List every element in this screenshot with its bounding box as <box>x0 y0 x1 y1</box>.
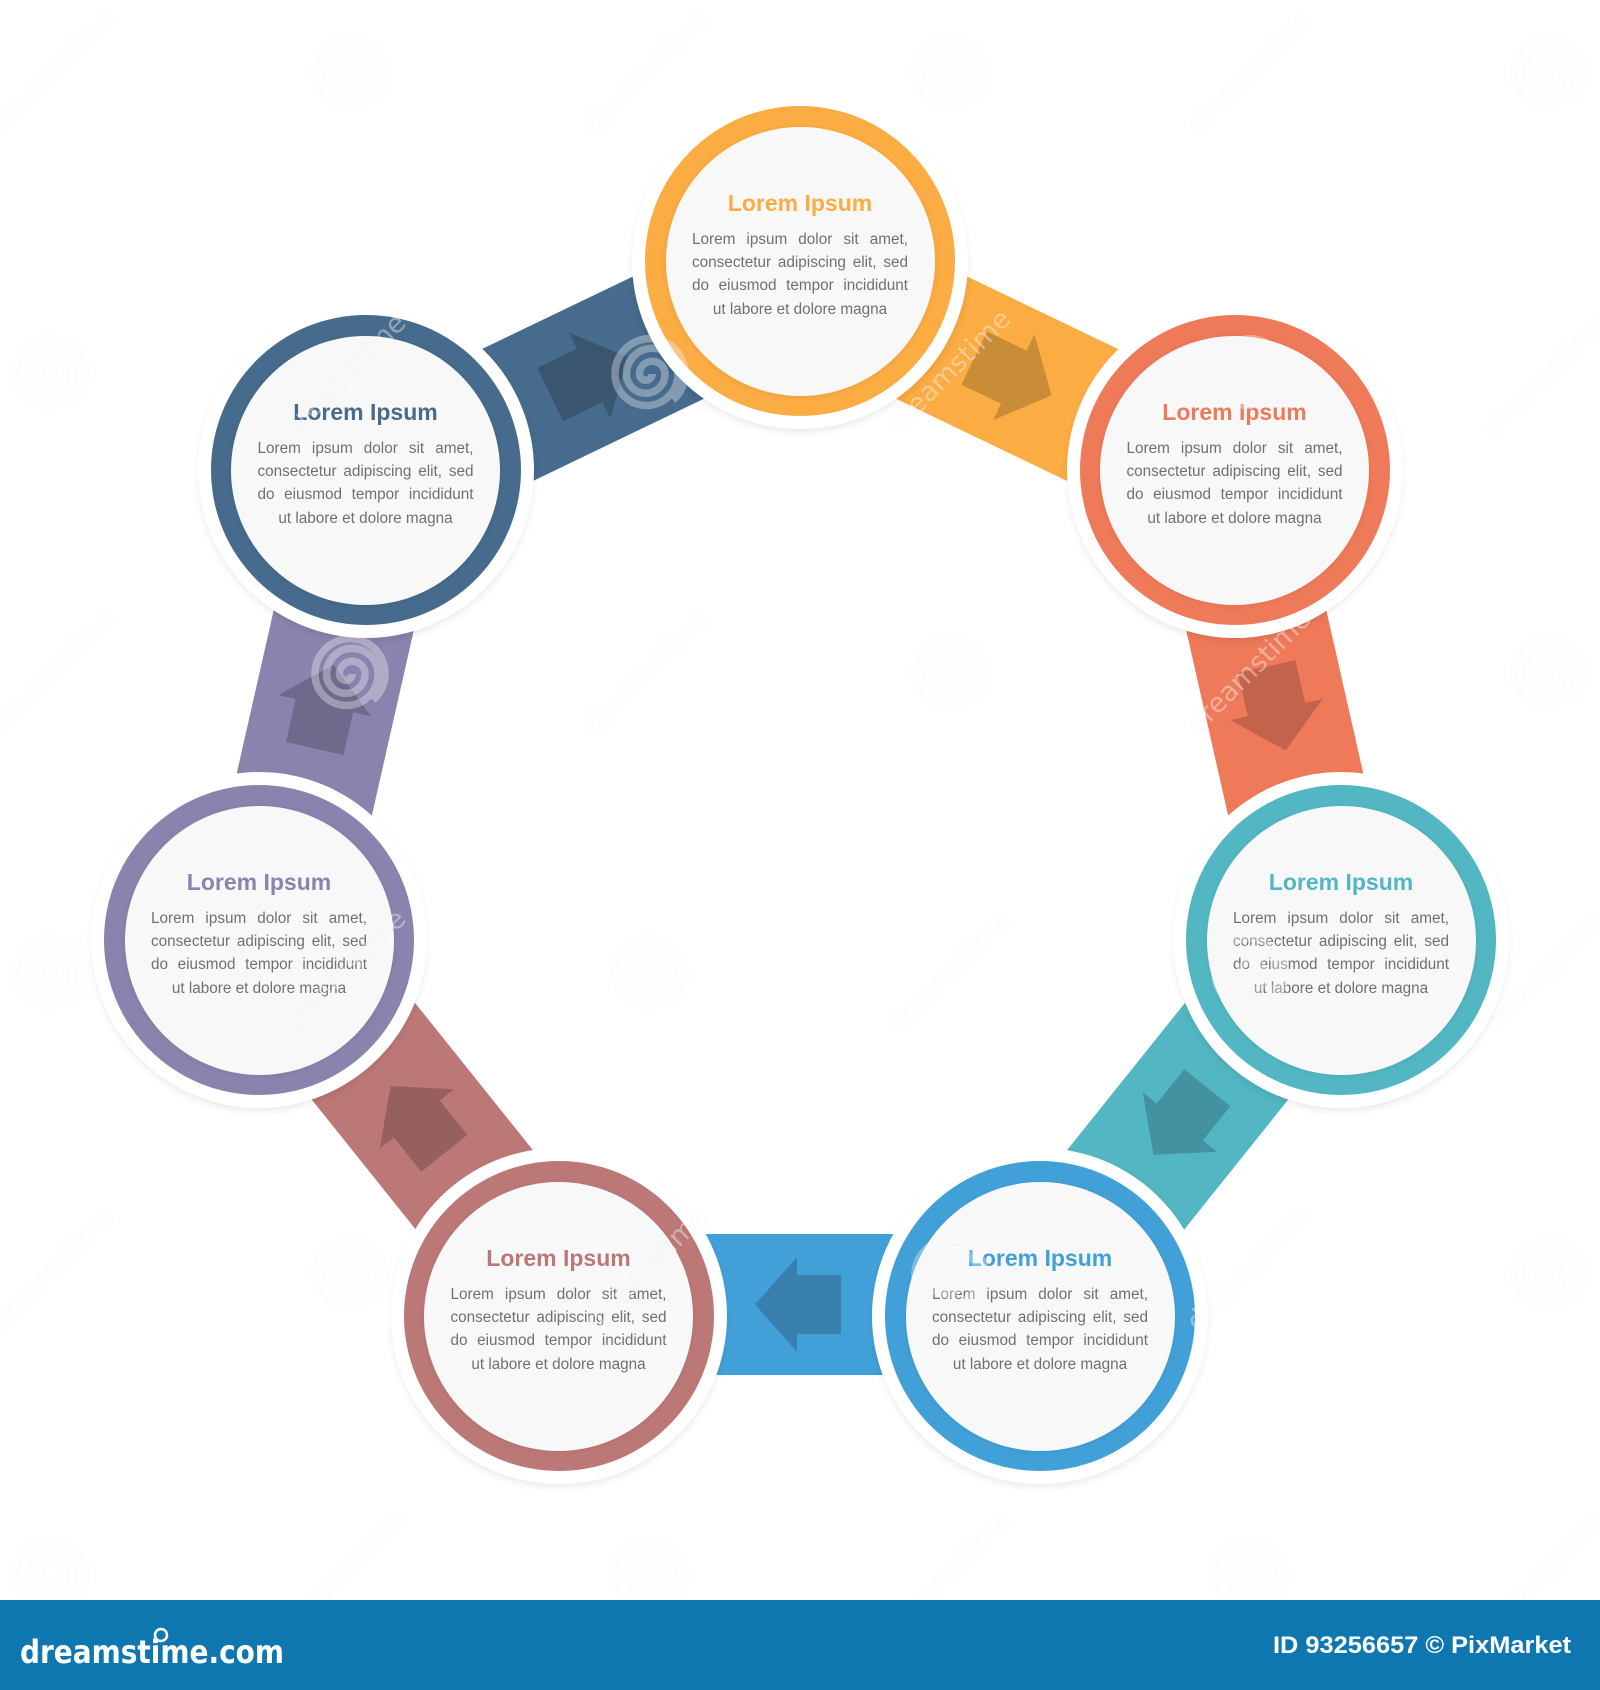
text block: rose <box>450 1286 666 1373</box>
circle: purple <box>91 772 427 1108</box>
arrow: navy <box>530 314 648 437</box>
arrow: orange <box>954 315 1072 438</box>
text block: coral <box>1126 440 1342 527</box>
text block: blue: Lorem ipsum dolor sit amet, <box>932 1286 1148 1302</box>
text block: navy: consectetur adipiscing elit, sed <box>258 463 474 480</box>
arrow: purple <box>268 654 380 759</box>
text block: blue: ut labore et dolore magna <box>953 1356 1127 1373</box>
text block: coral: ut labore et dolore magna <box>1147 510 1322 527</box>
text block: orange: ut labore et dolore magna <box>713 301 887 318</box>
connector: navy to orange <box>340 208 836 544</box>
text block: navy: Lorem ipsum dolor sit amet, <box>258 440 474 456</box>
connector: blue to rose <box>558 1234 1040 1375</box>
heading: orange: Lorem Ipsum <box>728 190 872 216</box>
text block: coral: do eiusmod tempor incididunt <box>1126 486 1342 503</box>
text block: teal: ut labore et dolore magna <box>1254 980 1428 997</box>
watermark text: dreamstime <box>1181 604 1317 740</box>
text block: navy: ut labore et dolore magna <box>278 510 453 527</box>
circle: orange <box>632 93 968 429</box>
footer band <box>0 1600 1600 1690</box>
circle: blue <box>872 1148 1208 1484</box>
heading: navy: Lorem Ipsum <box>293 399 438 425</box>
arrow: rose <box>354 1056 481 1183</box>
footer logo spiral <box>155 1629 167 1641</box>
circle: coral <box>1066 302 1402 638</box>
text block: rose: do eiusmod tempor incididunt <box>450 1332 666 1349</box>
text block: rose: consectetur adipiscing elit, sed <box>450 1309 666 1326</box>
watermark text: dreamstime <box>578 4 714 140</box>
footer logo: dreamstime.com <box>20 1633 284 1671</box>
text block: teal: consectetur adipiscing elit, sed <box>1233 933 1449 950</box>
text block: blue: do eiusmod tempor incididunt <box>932 1332 1148 1349</box>
watermark text: dreamstime <box>881 1504 1017 1640</box>
connector: orange to coral <box>764 208 1260 544</box>
text block: purple <box>151 910 367 997</box>
text block: orange: Lorem ipsum dolor sit amet, <box>692 230 908 248</box>
watermark text: dreamstime <box>1181 4 1317 140</box>
text block: rose: ut labore et dolore magna <box>471 1356 646 1373</box>
text block: coral: Lorem ipsum dolor sit amet, <box>1126 440 1342 456</box>
watermark text: dreamstime <box>881 304 1017 440</box>
text block: purple: Lorem ipsum dolor sit amet, <box>151 910 367 926</box>
text block: teal <box>1233 910 1449 997</box>
heading: blue: Lorem Ipsum <box>968 1245 1112 1271</box>
heading: rose: Lorem Ipsum <box>486 1245 631 1271</box>
text block: teal: do eiusmod tempor incididunt <box>1233 956 1449 973</box>
arrow: blue <box>755 1257 841 1352</box>
text block: purple: consectetur adipiscing elit, sed <box>151 933 367 950</box>
text block: blue <box>932 1286 1148 1373</box>
watermark text: dreamstime <box>276 1504 412 1640</box>
watermark text: dreamstime <box>276 904 412 1040</box>
watermark text: dreamstime <box>881 904 1017 1040</box>
text block: coral: consectetur adipiscing elit, sed <box>1126 463 1342 480</box>
connector: rose to purple <box>213 888 624 1353</box>
circle: teal <box>1173 772 1509 1108</box>
footer credit: ID 93256657 © PixMarket <box>1273 1632 1571 1659</box>
text block: navy: do eiusmod tempor incididunt <box>258 486 474 503</box>
text block: blue: consectetur adipiscing elit, sed <box>932 1309 1148 1326</box>
text block: orange: consectetur adipiscing elit, sed <box>692 254 908 271</box>
text block: navy <box>258 440 474 527</box>
text block: purple: do eiusmod tempor incididunt <box>151 956 367 973</box>
text block: orange <box>692 230 908 318</box>
connector: teal to blue <box>976 888 1387 1353</box>
watermark text: dreamstime <box>578 604 714 740</box>
connector: purple to navy <box>202 457 446 958</box>
arrow: coral <box>1220 656 1332 761</box>
watermark text: dreamstime <box>578 1201 714 1337</box>
heading: teal: Lorem Ipsum <box>1269 869 1413 895</box>
connector: coral to teal <box>1154 457 1398 958</box>
circle: navy <box>198 302 534 638</box>
heading: coral: Lorem Ipsum <box>1162 399 1307 425</box>
circle: rose <box>390 1148 726 1484</box>
watermark text: dreamstime <box>276 308 412 444</box>
text block: rose: Lorem ipsum dolor sit amet, <box>450 1286 666 1302</box>
text block: teal: Lorem ipsum dolor sit amet, <box>1233 910 1449 926</box>
arrow: teal <box>1116 1058 1244 1185</box>
watermark text: dreamstime <box>1181 1201 1317 1337</box>
text block: purple: ut labore et dolore magna <box>172 980 346 997</box>
heading: purple: Lorem Ipsum <box>187 869 331 895</box>
text block: orange: do eiusmod tempor incididunt <box>692 277 908 294</box>
